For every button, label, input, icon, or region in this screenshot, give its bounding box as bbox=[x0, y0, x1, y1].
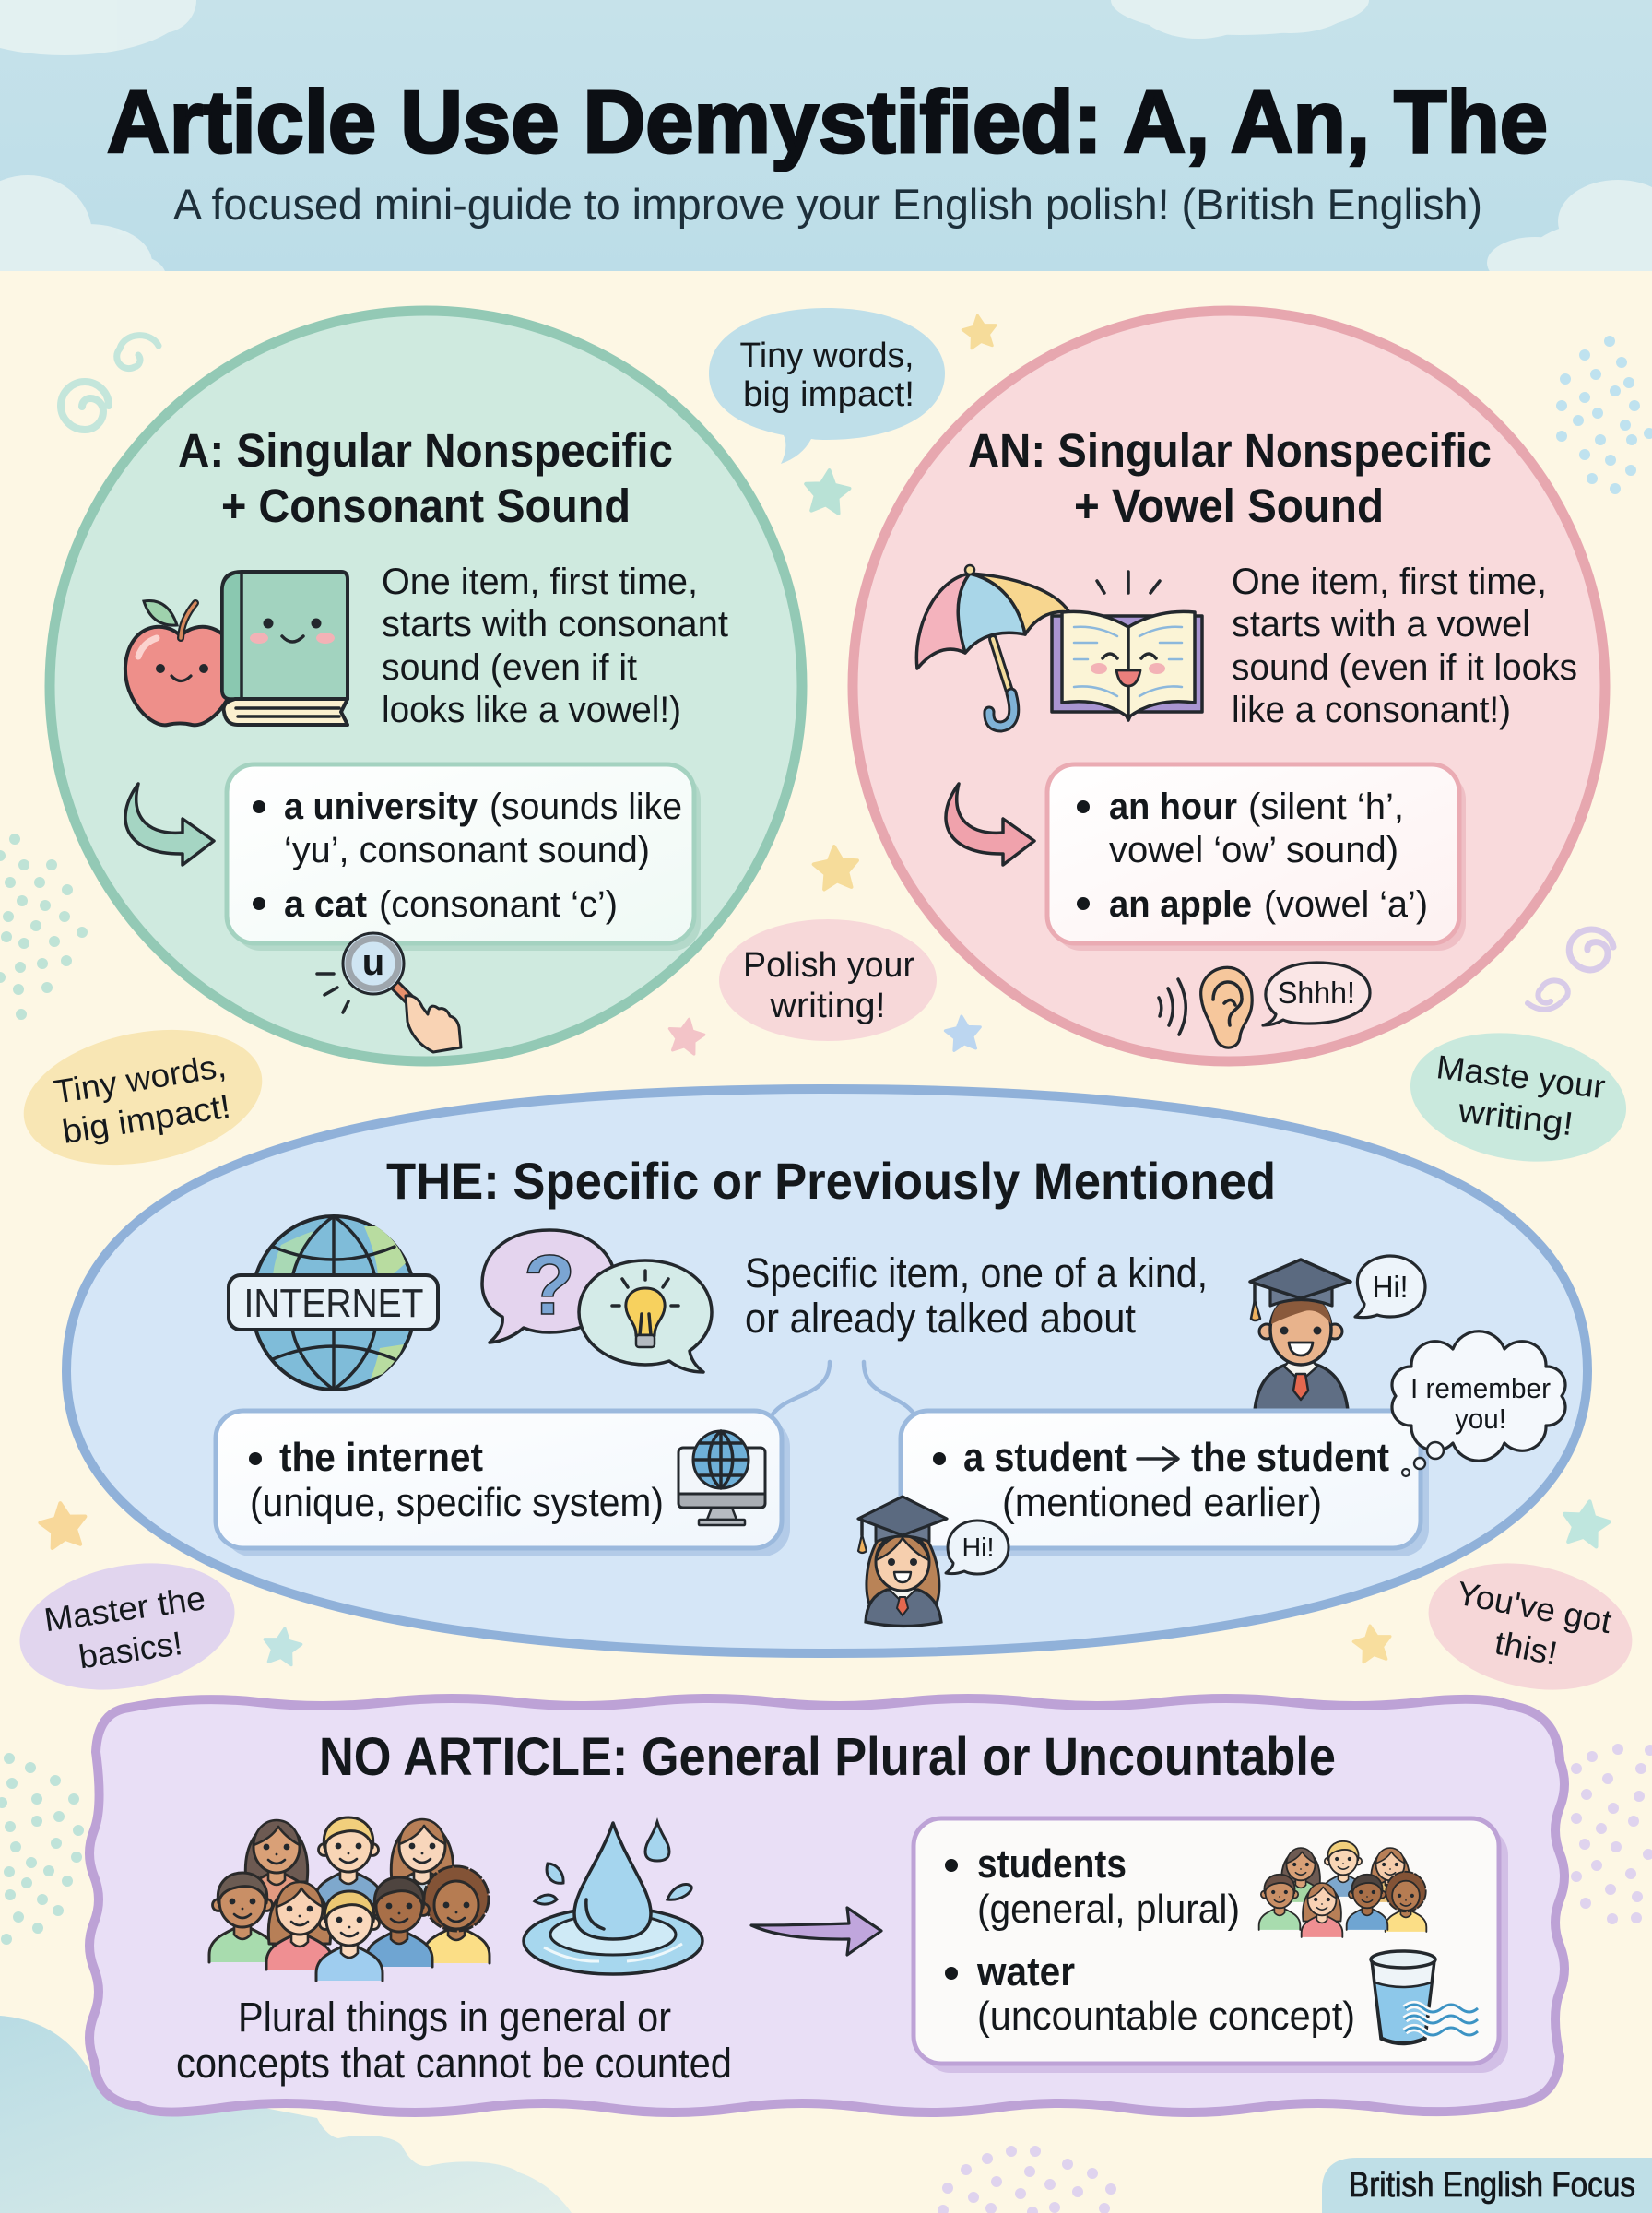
icon: water drop bbox=[524, 1822, 702, 1974]
panel: THE bbox=[66, 1089, 1587, 1653]
pill: maste your writing: Maste your bbox=[1434, 1047, 1608, 1106]
arrow A bbox=[125, 784, 214, 865]
example box: the internet: the internet bbox=[279, 1435, 483, 1480]
description no article: Plural things in general or bbox=[238, 1994, 671, 2041]
heading AN bbox=[968, 424, 1492, 532]
panel: AN bbox=[853, 311, 1605, 1061]
heading AN: + Vowel Sound bbox=[1074, 479, 1384, 532]
pill: tiny words yellow: big impact! bbox=[60, 1087, 233, 1151]
icon: glass of water bbox=[1371, 1951, 1478, 2043]
example box: the student bbox=[901, 1411, 1429, 1556]
pill: master the basics: Master the bbox=[41, 1579, 207, 1639]
pill: master the basics bbox=[9, 1546, 245, 1707]
example box AN: an hour bbox=[1109, 787, 1237, 827]
pill: polish your writing: writing! bbox=[769, 987, 885, 1025]
description A: looks like a vowel!) bbox=[382, 690, 681, 730]
pill: you've got this bbox=[1417, 1545, 1644, 1708]
example box no article: (general, plural) bbox=[977, 1887, 1240, 1932]
panel: A bbox=[50, 311, 802, 1061]
icon: umbrella bbox=[916, 565, 1069, 727]
example box no article: students bbox=[977, 1841, 1127, 1887]
description A: starts with consonant bbox=[382, 604, 728, 645]
example box no article: (uncountable concept) bbox=[977, 1994, 1355, 2039]
pill: maste your writing: writing! bbox=[1456, 1091, 1575, 1142]
example box A: (sounds like bbox=[490, 787, 682, 827]
heading AN: AN: Singular Nonspecific bbox=[968, 424, 1492, 477]
example box: the student: a student bbox=[963, 1435, 1127, 1480]
thought cloud: I remember you bbox=[1392, 1331, 1565, 1476]
description A: sound (even if it bbox=[382, 647, 637, 688]
icon: ear with sound waves bbox=[1159, 967, 1252, 1047]
arrow no article bbox=[751, 1908, 881, 1955]
description AN: starts with a vowel bbox=[1232, 604, 1530, 645]
speech bubble: Shhh bbox=[1263, 963, 1370, 1025]
icon: monitor with globe bbox=[678, 1431, 765, 1525]
subtitle: A focused mini-guide to improve your English polish! (British English) bbox=[173, 180, 1482, 229]
arrow AN bbox=[946, 784, 1034, 865]
title: Article Use Demystified: A, An, The bbox=[107, 73, 1548, 172]
description AN: like a consonant!) bbox=[1232, 690, 1511, 730]
example box AN: (silent ‘h’, bbox=[1248, 787, 1404, 827]
bottom left cloud bbox=[0, 2016, 572, 2213]
footer tag bbox=[1322, 2158, 1652, 2213]
example box: the internet: (unique, specific system) bbox=[250, 1480, 664, 1525]
example box AN bbox=[1047, 764, 1466, 951]
example box AN: vowel ‘ow’ sound) bbox=[1109, 830, 1398, 870]
speech bubble: Hi male bbox=[1355, 1256, 1425, 1318]
circle background A bbox=[50, 311, 802, 1061]
speech bubble: Hi female: Hi! bbox=[962, 1533, 994, 1563]
wavy background bbox=[89, 1698, 1564, 2112]
pill: polish your writing bbox=[719, 919, 937, 1041]
example box no article: water bbox=[976, 1949, 1075, 1994]
heading A bbox=[178, 424, 673, 532]
decorative stars bbox=[38, 314, 1612, 1666]
heading no article: NO ARTICLE: General Plural or Uncountable bbox=[319, 1727, 1336, 1787]
character: female student bbox=[858, 1497, 947, 1627]
icon: question bubble bbox=[482, 1230, 616, 1343]
speech bubble: Shhh: Shhh! bbox=[1278, 976, 1355, 1010]
circle background AN bbox=[853, 311, 1605, 1061]
panel: NO ARTICLE bbox=[89, 1698, 1564, 2112]
connector lines bbox=[773, 1362, 914, 1414]
description AN: One item, first time, bbox=[1232, 562, 1547, 602]
heading A: + Consonant Sound bbox=[221, 479, 631, 532]
icon: internet globe bbox=[229, 1216, 438, 1390]
description no article: concepts that cannot be counted bbox=[176, 2040, 732, 2087]
pill: you've got this: You've got bbox=[1454, 1574, 1614, 1640]
ellipse background THE bbox=[66, 1089, 1587, 1653]
example box A: a university bbox=[284, 787, 478, 827]
example box: the student: (mentioned earlier) bbox=[1002, 1480, 1322, 1525]
decorative swirls bbox=[61, 336, 1613, 1010]
header clouds bbox=[0, 0, 1652, 271]
speech bubble: Hi female bbox=[946, 1521, 1009, 1574]
description AN: sound (even if it looks bbox=[1232, 647, 1577, 688]
description A: One item, first time, bbox=[382, 562, 698, 602]
thought cloud: I remember you: you! bbox=[1455, 1402, 1506, 1435]
example box A: ‘yu’, consonant sound) bbox=[284, 830, 650, 870]
header banner bbox=[0, 0, 1652, 271]
icon: apple bbox=[125, 601, 236, 725]
icon: question bubble: ? bbox=[524, 1238, 575, 1332]
example box no article bbox=[914, 1818, 1508, 2073]
example box A: a cat bbox=[284, 884, 367, 925]
pill: tiny words yellow bbox=[12, 1011, 274, 1184]
speech bubble: tiny words: big impact! bbox=[743, 375, 914, 414]
icon: open book with face bbox=[1052, 572, 1202, 720]
icon: light bulb bubble bbox=[579, 1260, 712, 1372]
pill: master the basics: basics! bbox=[77, 1624, 184, 1675]
icon: magnifier and hand: u bbox=[362, 942, 384, 983]
description AN bbox=[1232, 562, 1577, 730]
pill: tiny words yellow: Tiny words, bbox=[52, 1047, 229, 1111]
description THE: Specific item, one of a kind, bbox=[745, 1249, 1208, 1296]
heading THE: THE: Specific or Previously Mentioned bbox=[386, 1152, 1276, 1210]
icon: internet globe: INTERNET bbox=[243, 1281, 424, 1326]
pill: you've got this: this! bbox=[1492, 1623, 1561, 1673]
speech bubble: Hi male: Hi! bbox=[1372, 1270, 1409, 1304]
example box AN: (vowel ‘a’) bbox=[1264, 884, 1428, 925]
thought cloud: I remember you: I remember bbox=[1410, 1372, 1551, 1404]
description A bbox=[382, 562, 728, 730]
description no article bbox=[176, 1994, 732, 2087]
example box AN: an apple bbox=[1109, 884, 1252, 925]
example box A: (consonant ‘c’) bbox=[379, 884, 618, 925]
description THE: or already talked about bbox=[745, 1295, 1136, 1342]
icon: small crowd bbox=[1259, 1841, 1426, 1937]
icon: crowd of students bbox=[209, 1817, 490, 1981]
icon: book with face bbox=[222, 572, 348, 725]
icon: magnifier and hand bbox=[317, 933, 461, 1052]
heading A: A: Singular Nonspecific bbox=[178, 424, 673, 477]
speech bubble: tiny words: Tiny words, bbox=[739, 337, 914, 375]
pill: maste your writing bbox=[1401, 1018, 1635, 1177]
character: male student bbox=[1250, 1260, 1351, 1411]
example box: the student: the student bbox=[1191, 1435, 1389, 1480]
speech bubble: tiny words bbox=[709, 308, 945, 464]
pill: polish your writing: Polish your bbox=[743, 946, 914, 985]
description THE bbox=[745, 1249, 1208, 1342]
example box A bbox=[227, 764, 701, 951]
example box: the internet bbox=[216, 1411, 790, 1556]
